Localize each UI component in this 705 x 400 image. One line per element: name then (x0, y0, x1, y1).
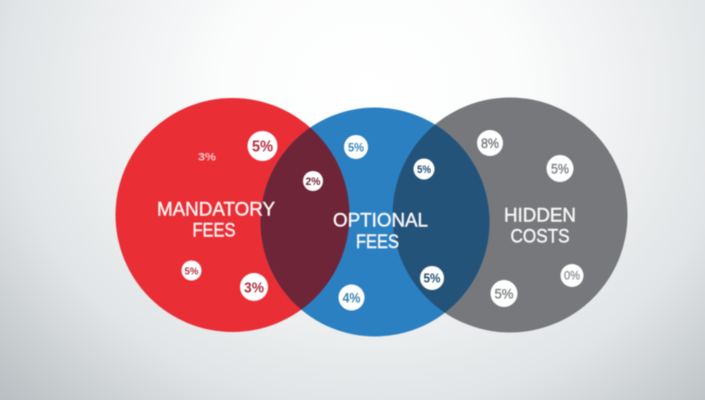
circle: hidden costs (392, 98, 628, 332)
overlap: mandatory and optional (260, 127, 350, 310)
label: optional fees: FEES (356, 232, 399, 253)
badge: blue 5%: 5% (348, 140, 364, 154)
venn diagram (116, 98, 628, 336)
badge: blue 4% (338, 284, 364, 310)
badge: grey lower 5%: 5% (494, 286, 514, 302)
label: mandatory fees: FEES (192, 220, 236, 242)
badge: red 3%: 3% (244, 280, 264, 296)
badge: grey 8% (477, 130, 503, 156)
badge: red 5% (248, 131, 278, 161)
badge: grey upper 5%: 5% (551, 162, 569, 176)
overlap: optional and hidden (392, 124, 490, 313)
badge: red 3% (240, 273, 268, 301)
badge: grey 0% (560, 264, 584, 287)
badge: grey 0%: 0% (564, 270, 580, 282)
badge: blue 5% (344, 135, 368, 159)
badge: overlap lower 5% (420, 266, 444, 290)
badge: grey lower 5% (490, 280, 518, 307)
badge: blue 4%: 4% (342, 290, 360, 306)
label: optional fees (333, 210, 428, 253)
value: 3% plain: 3% (198, 152, 216, 164)
label: hidden costs (504, 206, 576, 248)
label: mandatory fees (157, 200, 275, 242)
label: mandatory fees: MANDATORY (157, 200, 275, 220)
label: optional fees: OPTIONAL (333, 210, 428, 232)
label: hidden costs: HIDDEN (504, 206, 576, 226)
badge: red small 5% (182, 260, 202, 280)
badge: red 5%: 5% (252, 138, 273, 156)
badge: grey 8%: 8% (481, 136, 499, 151)
badge: red small 5%: 5% (184, 266, 199, 278)
badge: overlap upper 5%: 5% (417, 164, 431, 176)
badge: overlap upper 5% (414, 158, 434, 180)
label: hidden costs: COSTS (510, 226, 570, 248)
badge: overlap lower 5%: 5% (424, 272, 440, 286)
circle: mandatory fees (116, 98, 350, 332)
circle: optional fees (260, 108, 490, 336)
badge: overlap 2%: 2% (306, 176, 321, 188)
badge: grey upper 5% (546, 155, 574, 182)
badge: overlap 2% (303, 171, 323, 191)
